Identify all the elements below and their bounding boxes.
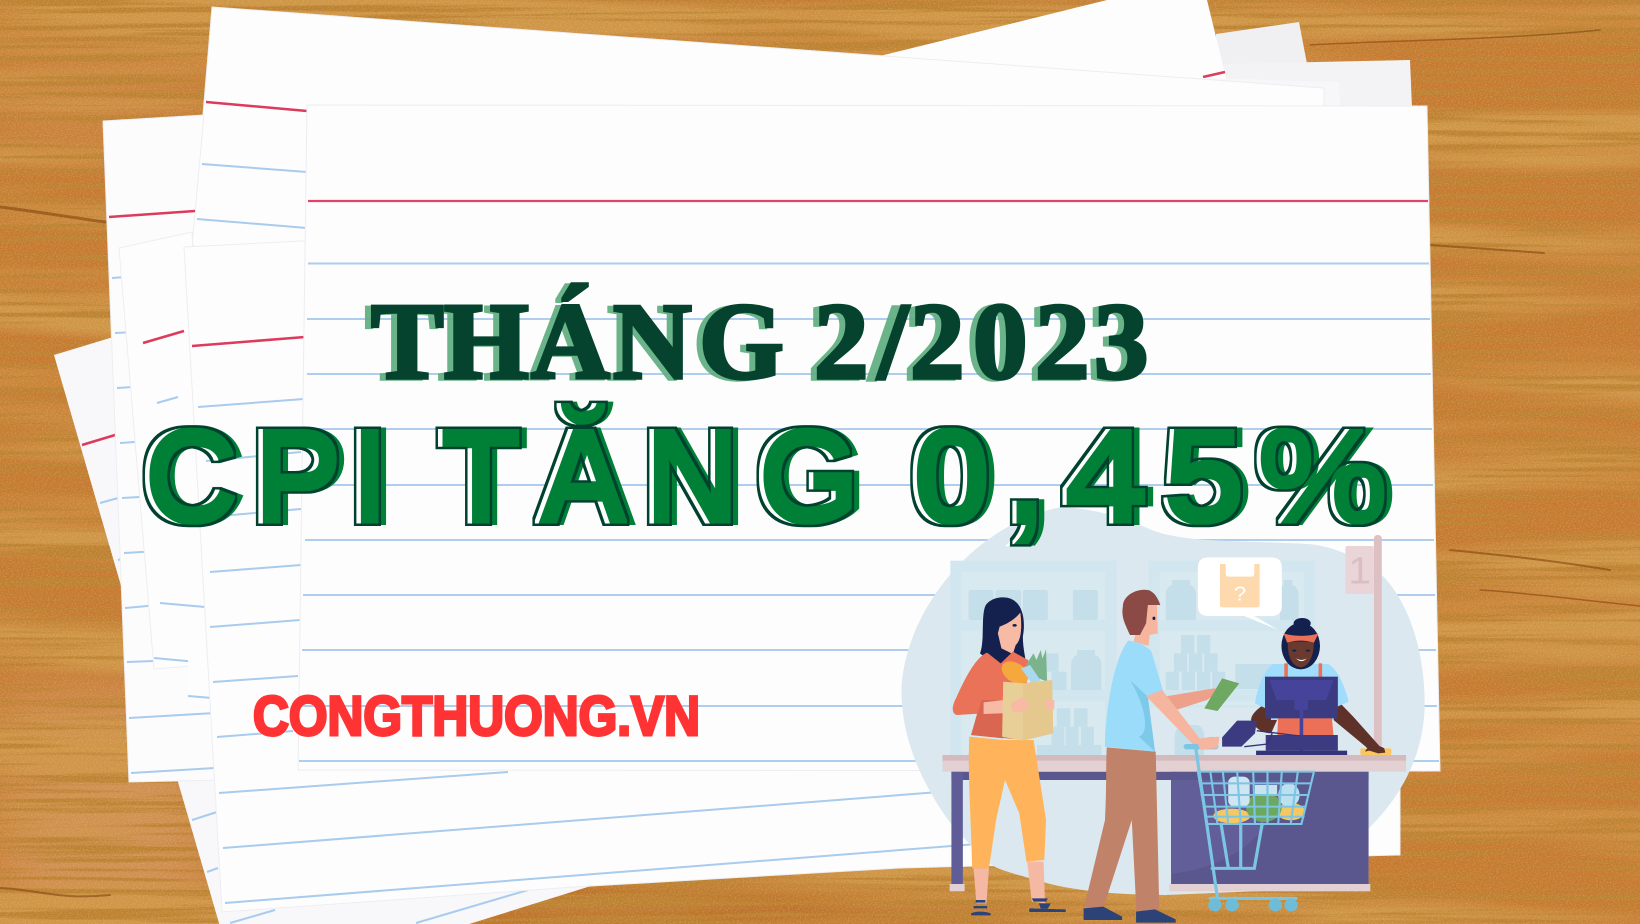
headline: CPI TĂNG 0,45%: 0,45% — [908, 401, 1387, 550]
cashier — [1251, 618, 1384, 753]
face — [998, 613, 1021, 654]
sheet: left — [103, 115, 320, 782]
shopping cart — [1186, 747, 1314, 911]
title: THÁNG 2/2023: THÁNG 2/2023 — [371, 281, 1148, 402]
arm — [984, 700, 1023, 714]
top — [953, 652, 1028, 740]
woman shopper — [953, 597, 1066, 915]
headline: CPI TĂNG 0,45%: 0,45% — [908, 401, 1387, 550]
cashier hand — [1365, 746, 1385, 753]
man's hand on cart — [1198, 737, 1219, 749]
headline: CPI TĂNG 0,45%: CPI TĂNG — [147, 403, 864, 551]
sheet: behind large top — [1000, 72, 1340, 110]
eye — [1152, 617, 1155, 620]
background blob — [901, 507, 1425, 895]
headline: CPI TĂNG 0,45% — [141, 401, 1393, 551]
shirt — [1105, 641, 1163, 752]
neck and face — [1134, 603, 1158, 646]
legs — [974, 868, 989, 903]
sheet: top right tilted — [880, 0, 1226, 112]
handle — [1186, 739, 1216, 755]
speech bubble with bag icon — [1198, 557, 1282, 630]
frame — [1196, 750, 1296, 898]
back arm — [1164, 688, 1223, 712]
hands — [1010, 697, 1054, 713]
sheet: far back tilted — [54, 250, 610, 924]
shelves — [950, 561, 1315, 756]
basket — [1198, 772, 1314, 824]
money — [1204, 678, 1239, 711]
front arm — [1146, 690, 1219, 749]
headline: CPI TĂNG 0,45%: CPI TĂNG — [141, 403, 858, 551]
sandals — [971, 900, 991, 915]
hair — [1122, 590, 1160, 635]
grocery bag — [997, 649, 1053, 741]
sheet: large bottom — [184, 240, 1400, 912]
wheels — [1208, 899, 1298, 911]
headline: CPI TĂNG 0,45%: CPI TĂNG — [141, 403, 858, 551]
cash register — [1244, 677, 1347, 755]
eye — [1012, 624, 1017, 627]
item on counter — [1360, 748, 1391, 755]
sheet: large top — [192, 7, 1324, 300]
man shopper — [1084, 590, 1239, 923]
pants — [1084, 747, 1159, 912]
sign pole with number 1 — [1345, 535, 1382, 748]
headline: CPI TĂNG 0,45%: 0,45% — [914, 401, 1393, 550]
shoes — [1084, 907, 1176, 923]
sheet: front — [298, 105, 1440, 771]
sheet: small tilted middle — [119, 232, 215, 706]
pants — [969, 737, 1046, 868]
counter — [942, 755, 1406, 891]
speech bubble with bag icon: ? — [1234, 582, 1246, 605]
brand: CONGTHUONG.VN: CONGTHUONG.VN — [253, 684, 700, 747]
sheet: top right wide — [1224, 60, 1412, 108]
card terminal — [1222, 721, 1257, 747]
title: THÁNG 2/2023: THÁNG 2/2023 — [365, 282, 1142, 403]
cart goods — [1213, 777, 1305, 823]
hair — [980, 597, 1026, 666]
sheet: top right small — [1216, 22, 1307, 112]
sign pole with number 1: 1 — [1348, 550, 1371, 592]
illustration: supermarket checkout — [901, 507, 1425, 923]
